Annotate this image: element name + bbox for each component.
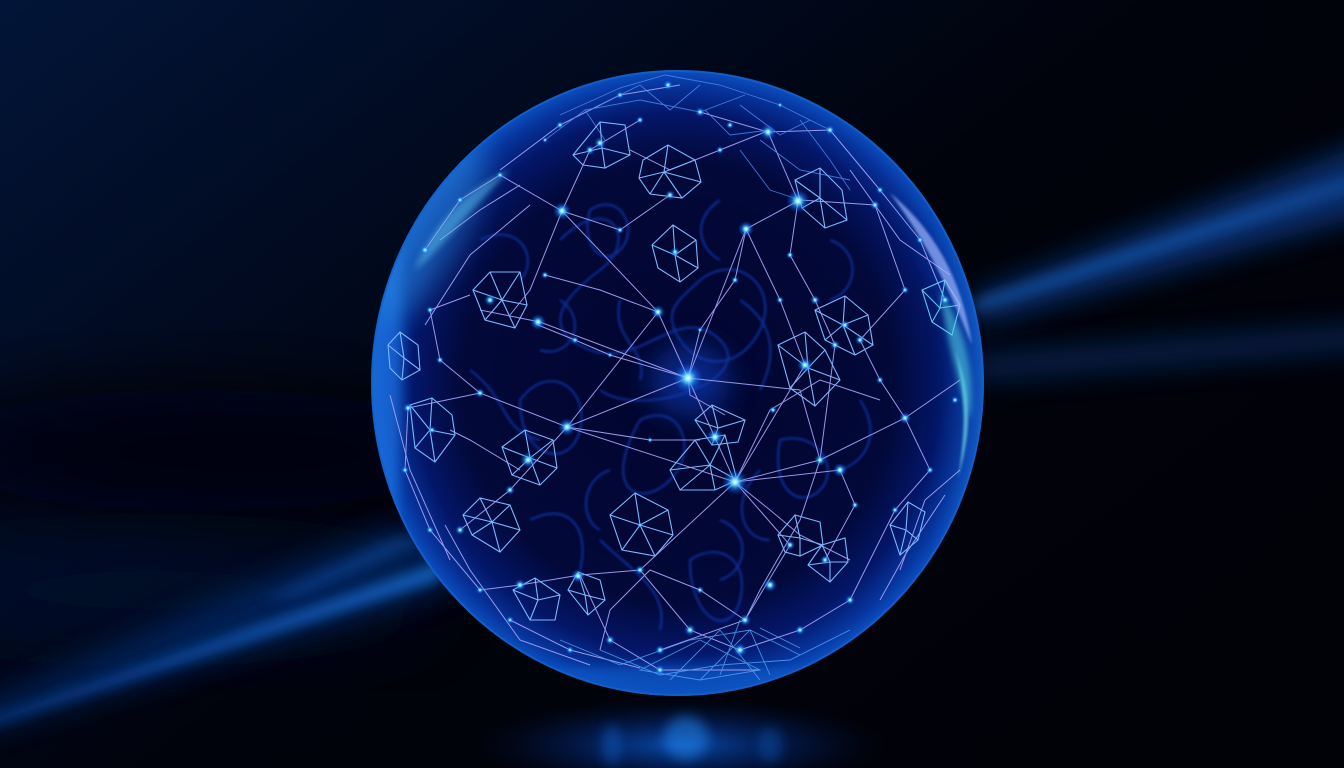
polyhedron: centre [670,435,737,490]
network connection lines [390,85,960,670]
floor reflection [475,697,885,768]
polyhedron: lower right [778,515,823,556]
inner glass highlights [415,170,972,478]
polyhedron: bottom centre [610,493,673,556]
polyhedron: right upper [815,296,873,355]
polyhedron: upper left [473,272,527,328]
dense mesh near sphere top [545,75,850,200]
light beam: upper right [975,130,1344,325]
polyhedron: upper right [795,168,847,228]
polyhedron: edge left [388,332,420,380]
polyhedron: top centre [639,145,701,198]
dense mesh near sphere bottom [560,620,850,680]
polyhedron: far lower right [890,502,925,555]
polyhedron: upper centre [652,225,698,282]
polyhedron: bottom left [513,578,560,620]
polyhedron clusters [388,122,960,620]
polyhedron: upper top left [573,122,630,168]
polyhedron: far right [922,280,960,335]
polyhedron: lower left [463,498,520,552]
node: bright centre hubs [673,363,703,393]
glass rim [372,71,983,695]
glass sphere body [371,70,984,696]
node: small dots [475,388,485,398]
light beam: lower left [0,525,450,745]
polyhedron: lower mid left [502,430,557,485]
light beam: middle right [975,322,1344,380]
polyhedron: bottom left second [568,572,605,615]
polyhedron: left [410,398,455,462]
polyhedron: right middle [778,332,840,406]
glowing nodes [401,80,959,675]
polyhedron: lower right small [808,538,848,582]
deep background network inside sphere [470,200,870,630]
polyhedron: centre small [695,405,745,445]
